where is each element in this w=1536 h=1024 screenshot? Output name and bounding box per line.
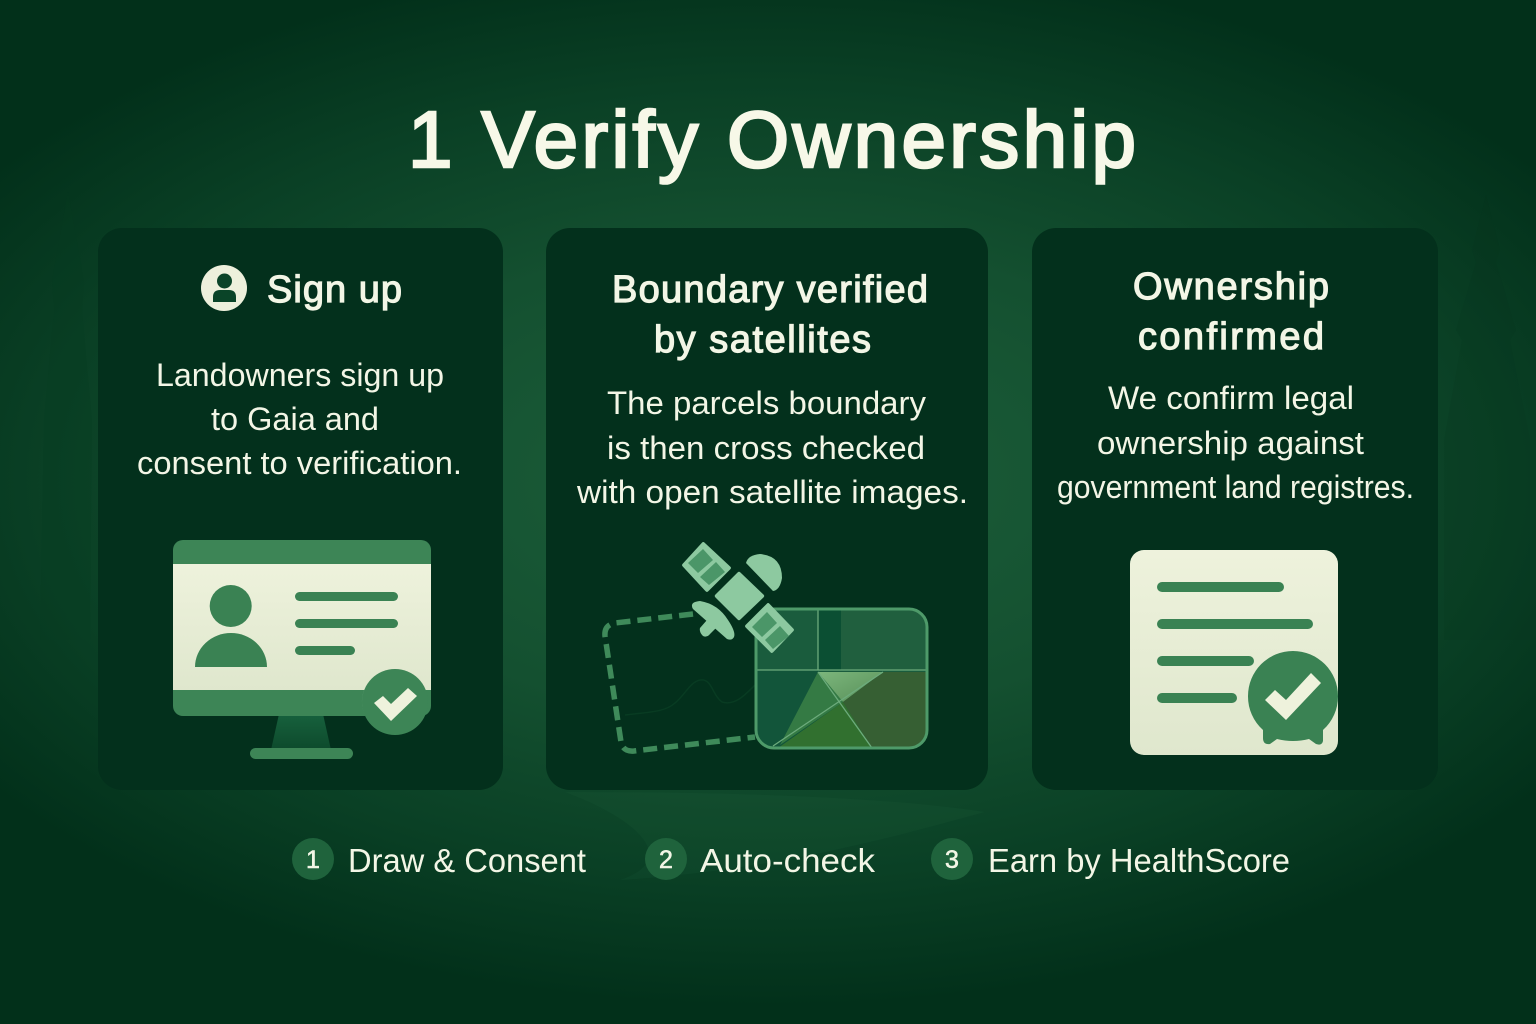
heading: ownership confirmed: confirmed (1138, 316, 1324, 358)
faint path shape (565, 792, 985, 880)
text: boundary description: with open satellite images. (576, 474, 968, 510)
heading: ownership confirmed (1133, 266, 1329, 358)
text: boundary description (576, 385, 968, 510)
text: sign up description: consent to verification. (137, 445, 462, 481)
icon: dashed parcel boundary (605, 614, 755, 751)
step 1: 1 (306, 846, 320, 874)
icon: satellite (684, 544, 792, 651)
heading: sign up: Sign up (267, 269, 402, 311)
text: sign up description: to Gaia and (211, 401, 379, 437)
heading: boundary verified: by satellites (654, 319, 871, 361)
text: ownership description (1057, 380, 1414, 505)
step 3: Earn by HealthScore (988, 842, 1290, 879)
text: ownership description: ownership against (1097, 425, 1364, 461)
text: ownership description: government land registres. (1057, 469, 1414, 505)
panel: boundary (546, 228, 988, 790)
map: satellite image (756, 609, 927, 748)
step 1: Draw & Consent (348, 842, 586, 879)
heading: ownership confirmed: Ownership (1133, 266, 1329, 308)
icon: document with check (1130, 550, 1338, 755)
heading: boundary verified: Boundary verified (612, 269, 928, 311)
heading: boundary verified (612, 269, 928, 361)
text: sign up description: Landowners sign up (156, 357, 444, 393)
text: boundary description: is then cross checked (607, 430, 925, 466)
text: ownership description: We confirm legal (1108, 380, 1354, 416)
step 2: Auto-check (700, 842, 876, 879)
text: boundary description: The parcels boundary (607, 385, 926, 421)
step 2: 2 (659, 846, 673, 874)
tree silhouette left (40, 192, 92, 640)
text: sign up description (137, 357, 462, 481)
panel: sign up (98, 228, 503, 790)
tree silhouette right (1444, 195, 1530, 640)
title: 1 Verify Ownership (408, 95, 1136, 184)
icon: user badge (201, 265, 247, 311)
icon: monitor with profile (173, 540, 431, 759)
step 2 (645, 838, 876, 880)
panel: ownership (1032, 228, 1438, 790)
step 3: 3 (945, 846, 959, 874)
